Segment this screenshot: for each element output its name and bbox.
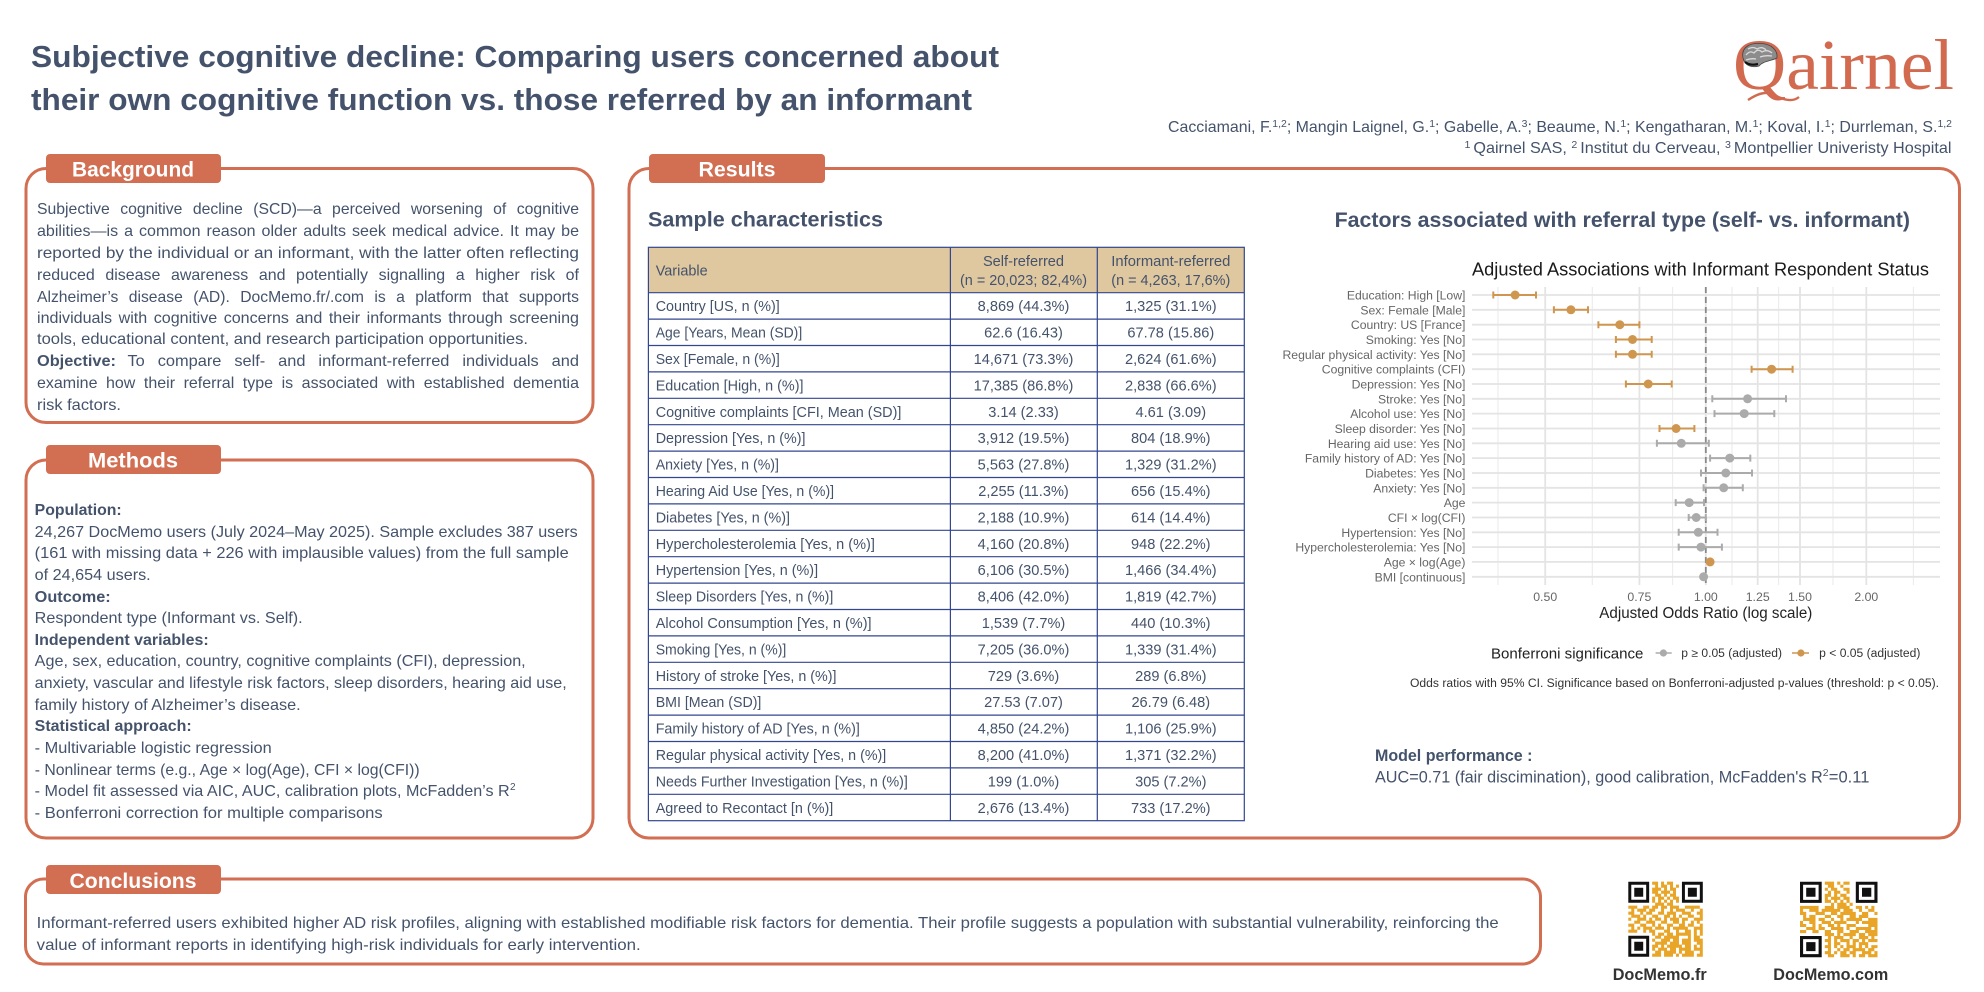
table: sample characteristics: Smoking [Yes, n (%)]: [656, 642, 786, 658]
table: sample characteristics: Cognitive complaints [CFI, Mean (SD)]: [656, 405, 901, 421]
heading: results: [649, 154, 825, 183]
table: sample characteristics: 440 (10.3%): [1131, 616, 1211, 632]
text: model performance: 2: [1823, 767, 1829, 779]
table: sample characteristics: Self-referred: [983, 254, 1064, 270]
text: conclusions: value of informant reports in identifying high-risk individuals for early intervention.: [37, 937, 641, 954]
y axis labels: Stroke: Yes [No]: [1378, 392, 1465, 406]
table: sample characteristics: History of stroke [Yes, n (%)]: [656, 669, 836, 685]
text: methods: - Multivariable logistic regression: [35, 740, 272, 757]
y axis labels: Sleep disorder: Yes [No]: [1335, 422, 1465, 436]
authors: 1,2: [1272, 118, 1287, 130]
text: background paragraph: risk factors.: [37, 397, 121, 414]
table: sample characteristics: 26.79 (6.48): [1131, 695, 1210, 711]
QR code: DocMemo.fr: [1613, 883, 1707, 984]
y axis labels: [1282, 288, 1466, 584]
table: sample characteristics: 2,838 (66.6%): [1125, 378, 1217, 394]
y axis labels: Regular physical activity: Yes [No]: [1282, 348, 1465, 362]
table: sample characteristics: Depression [Yes, n (%)]: [656, 431, 806, 447]
authors: 3: [1522, 118, 1528, 130]
table: sample characteristics: 4,850 (24.2%): [978, 722, 1069, 738]
authors: ; Kengatharan, M.: [1626, 119, 1753, 136]
table: sample characteristics: 804 (18.9%): [1131, 431, 1211, 447]
authors: [1168, 118, 1952, 157]
text: methods: Statistical approach:: [35, 718, 192, 735]
logo: Qairnel: Qairnel: [1733, 25, 1954, 105]
table: sample characteristics: Variable: [656, 264, 708, 280]
text: background paragraph: abilities—is a common reason older adults seek medical advice. It may be: [37, 223, 579, 240]
QR code: DocMemo.com: [1773, 883, 1888, 984]
y axis labels: Diabetes: Yes [No]: [1365, 466, 1465, 480]
text: methods: [35, 502, 578, 822]
table: sample characteristics: Alcohol Consumption [Yes, n (%)]: [656, 616, 872, 632]
table: sample characteristics: Sex [Female, n (%)]: [656, 352, 780, 368]
text: model performance: [1375, 747, 1869, 786]
title: Subjective cognitive decline: Comparing users concerned about: [31, 39, 999, 74]
y axis labels: Sex: Female [Male]: [1360, 303, 1465, 317]
text: methods: 2: [510, 782, 516, 793]
text: model performance: =0.11: [1829, 768, 1869, 786]
heading: sample characteristics: Sample characteristics: [648, 208, 883, 232]
table: sample characteristics: Needs Further Investigation [Yes, n (%)]: [656, 774, 908, 790]
authors: 1,2: [1937, 118, 1952, 130]
authors: ; Beaume, N.: [1527, 119, 1620, 136]
table: sample characteristics: Country [US, n (%)]: [656, 299, 780, 315]
text: conclusions: Informant-referred users exhibited higher AD risk profiles, aligning with established modifiable risk factors for dementia. Their profile suggests a population with substantial vulnerability, reinforcing the: [37, 915, 1499, 932]
table: sample characteristics: 8,406 (42.0%): [978, 590, 1069, 606]
text: methods: - Model fit assessed via AIC, AUC, calibration plots, McFadden’s R: [35, 783, 510, 800]
y axis labels: Alcohol use: Yes [No]: [1350, 407, 1465, 421]
heading: methods: Methods: [88, 450, 178, 472]
y axis labels: Family history of AD: Yes [No]: [1305, 452, 1465, 466]
authors: 1: [1825, 118, 1831, 130]
text: background paragraph: [37, 201, 580, 414]
text: methods: Age, sex, education, country, cognitive complaints (CFI), depression,: [35, 653, 526, 670]
legend: Bonferroni significance: p ≥ 0.05 (adjusted): [1681, 648, 1782, 660]
y axis labels: Education: High [Low]: [1347, 288, 1465, 302]
table: sample characteristics: Sleep Disorders [Yes, n (%)]: [656, 590, 833, 606]
y axis labels: Depression: Yes [No]: [1352, 378, 1465, 392]
text: background paragraph: To compare self- and informant-referred individuals and: [128, 353, 579, 370]
x axis tick labels: 1.25: [1746, 590, 1770, 604]
table: sample characteristics: 1,325 (31.1%): [1125, 299, 1217, 315]
authors: 1: [1753, 118, 1759, 130]
y axis labels: Age: [1444, 496, 1466, 510]
title: [31, 39, 999, 117]
text: methods: Respondent type (Informant vs. Self).: [35, 610, 303, 627]
table: sample characteristics: 948 (22.2%): [1131, 537, 1211, 553]
table: sample characteristics: 14,671 (73.3%): [974, 352, 1073, 368]
table: sample characteristics: Hearing Aid Use [Yes, n (%)]: [656, 484, 834, 500]
text: methods: of 24,654 users.: [35, 567, 151, 584]
points and confidence intervals: [1493, 290, 1793, 581]
y axis labels: Hypertension: Yes [No]: [1341, 526, 1465, 540]
y axis labels: Smoking: Yes [No]: [1366, 333, 1465, 347]
panel: conclusions: [26, 865, 1540, 964]
y axis labels: Hypercholesterolemia: Yes [No]: [1295, 541, 1465, 555]
table: sample characteristics: 67.78 (15.86): [1127, 326, 1214, 342]
table: sample characteristics: Hypertension [Yes, n (%)]: [656, 563, 818, 579]
table: sample characteristics: Family history of AD [Yes, n (%)]: [656, 722, 860, 738]
table: sample characteristics: (n = 4,263, 17,6%): [1111, 273, 1230, 289]
text: model performance: Model performance :: [1375, 747, 1532, 765]
panel: results: [629, 154, 1960, 838]
authors: Cacciamani, F.: [1168, 119, 1273, 136]
table: sample characteristics: Hypercholesterolemia [Yes, n (%)]: [656, 537, 875, 553]
text: conclusions: [37, 915, 1499, 954]
text: background paragraph: Objective:: [37, 353, 116, 370]
table: sample characteristics: 4,160 (20.8%): [978, 537, 1069, 553]
x axis title: Adjusted Odds Ratio (log scale): [1599, 605, 1812, 622]
table: sample characteristics: 2,676 (13.4%): [978, 801, 1069, 817]
text: methods: anxiety, vascular and lifestyle risk factors, sleep disorders, hearing aid use,: [35, 675, 567, 692]
authors: ; Koval, I.: [1758, 119, 1825, 136]
panel: background: [26, 154, 593, 422]
table: sample characteristics: 8,200 (41.0%): [978, 748, 1069, 764]
text: methods: - Bonferroni correction for multiple comparisons: [35, 805, 383, 822]
heading: methods: [46, 445, 221, 474]
table: sample characteristics: Education [High, n (%)]: [656, 378, 804, 394]
y axis labels: Age × log(Age): [1384, 555, 1465, 569]
table: sample characteristics: 7,205 (36.0%): [978, 642, 1069, 658]
table: sample characteristics: Age [Years, Mean (SD)]: [656, 326, 802, 342]
label: DocMemo.fr: DocMemo.fr: [1613, 966, 1707, 984]
y axis labels: BMI [continuous]: [1375, 570, 1465, 584]
panel: methods: [26, 445, 593, 838]
chart title: Adjusted Associations with Informant Respondent Status: [1472, 258, 1929, 280]
x axis tick labels: [1533, 590, 1878, 604]
y axis labels: CFI × log(CFI): [1388, 511, 1465, 525]
heading: background: Background: [72, 158, 194, 182]
x axis tick labels: 1.00: [1694, 590, 1718, 604]
table: sample characteristics: Diabetes [Yes, n (%)]: [656, 510, 790, 526]
authors: Institut du Cerveau,: [1580, 140, 1725, 157]
heading: factors associated: Factors associated with referral type (self- vs. informant): [1335, 209, 1910, 232]
x axis tick labels: 0.75: [1627, 590, 1652, 604]
text: background paragraph: examine how their referral type is associated with established dementia: [37, 375, 579, 392]
text: methods: Independent variables:: [35, 632, 209, 649]
heading: conclusions: Conclusions: [70, 870, 196, 893]
authors: Montpellier Univeristy Hospital: [1734, 140, 1952, 157]
table: sample characteristics: 3.14 (2.33): [988, 405, 1059, 421]
x axis tick labels: 0.50: [1533, 590, 1557, 604]
table: sample characteristics: 27.53 (7.07): [984, 695, 1063, 711]
legend: Bonferroni significance: p < 0.05 (adjusted): [1819, 648, 1921, 660]
table: sample characteristics: BMI [Mean (SD)]: [656, 695, 761, 711]
chart: forest plot of adjusted odds ratios: [1282, 258, 1940, 690]
label: DocMemo.com: DocMemo.com: [1773, 966, 1888, 984]
authors: Qairnel SAS,: [1473, 140, 1571, 157]
heading: background: [46, 154, 221, 183]
text: background paragraph: individuals with cognitive concerns and their informants through screening: [37, 310, 579, 327]
authors: 3: [1725, 139, 1734, 151]
text: background paragraph: Alzheimer’s disease (AD). DocMemo.fr/.com is a platform that supports: [37, 289, 579, 306]
y axis labels: Anxiety: Yes [No]: [1373, 481, 1465, 495]
chart footnote: Odds ratios with 95% CI. Significance based on Bonferroni-adjusted p-values (threshold: p < 0.05).: [1410, 678, 1939, 690]
heading: conclusions: [46, 865, 221, 894]
table: sample characteristics: 289 (6.8%): [1135, 669, 1206, 685]
y axis labels: Hearing aid use: Yes [No]: [1328, 437, 1465, 451]
authors: ; Durrleman, S.: [1831, 119, 1937, 136]
table: sample characteristics: 199 (1.0%): [988, 774, 1059, 790]
text: methods: Outcome:: [35, 589, 111, 606]
table: sample characteristics: Informant-referred: [1111, 254, 1230, 270]
y axis labels: Country: US [France]: [1351, 318, 1465, 332]
heading: results: Results: [698, 158, 776, 182]
table: sample characteristics: 3,912 (19.5%): [978, 431, 1069, 447]
table: sample characteristics: 2,188 (10.9%): [978, 510, 1069, 526]
text: background paragraph: reported by the individual or an informant, with the latter often reflecting: [37, 245, 579, 262]
authors: 2: [1571, 139, 1580, 151]
table: sample characteristics: 2,255 (11.3%): [978, 484, 1069, 500]
table: sample characteristics: 305 (7.2%): [1135, 774, 1206, 790]
table: sample characteristics: 1,466 (34.4%): [1125, 563, 1217, 579]
table: sample characteristics: 614 (14.4%): [1131, 510, 1211, 526]
text: methods: family history of Alzheimer’s disease.: [35, 697, 301, 714]
text: background paragraph: reduced disease awareness and potentially signalling a higher risk of: [37, 267, 580, 284]
table: sample characteristics: (n = 20,023; 82,4%): [960, 273, 1087, 289]
table: sample characteristics: 8,869 (44.3%): [978, 299, 1069, 315]
y axis labels: Cognitive complaints (CFI): [1322, 363, 1465, 377]
table: sample characteristics: 62.6 (16.43): [984, 326, 1063, 342]
authors: 1: [1620, 118, 1626, 130]
legend: Bonferroni significance: [1491, 646, 1921, 662]
table: sample characteristics: 1,819 (42.7%): [1125, 590, 1217, 606]
table: sample characteristics: 17,385 (86.8%): [974, 378, 1073, 394]
table: sample characteristics: 729 (3.6%): [988, 669, 1059, 685]
table: sample characteristics: Regular physical activity [Yes, n (%)]: [656, 748, 886, 764]
x axis tick labels: 2.00: [1854, 590, 1878, 604]
text: methods: - Nonlinear terms (e.g., Age × log(Age), CFI × log(CFI)): [35, 762, 420, 779]
authors: 1: [1429, 118, 1435, 130]
table: sample characteristics: 2,624 (61.6%): [1125, 352, 1217, 368]
table: sample characteristics: [648, 247, 1244, 821]
text: methods: 24,267 DocMemo users (July 2024–May 2025). Sample excludes 387 users: [35, 524, 578, 541]
table: sample characteristics: 1,339 (31.4%): [1125, 642, 1217, 658]
text: background paragraph: tools, educational content, and research participation opportunities.: [37, 331, 528, 348]
text: methods: Population:: [35, 502, 122, 519]
authors: ; Mangin Laignel, G.: [1287, 119, 1429, 136]
text: model performance: AUC=0.71 (fair discimination), good calibration, McFadden's R: [1375, 768, 1823, 786]
table: sample characteristics: 733 (17.2%): [1131, 801, 1211, 817]
table: sample characteristics: 1,371 (32.2%): [1125, 748, 1217, 764]
legend: Bonferroni significance: Bonferroni significance: [1491, 646, 1643, 662]
authors: 1: [1464, 139, 1473, 151]
table: sample characteristics: 656 (15.4%): [1131, 484, 1211, 500]
title: their own cognitive function vs. those referred by an informant: [31, 82, 972, 117]
table: sample characteristics: 6,106 (30.5%): [978, 563, 1069, 579]
table: sample characteristics: Agreed to Recontact [n (%)]: [656, 801, 833, 817]
table: sample characteristics: 4.61 (3.09): [1136, 405, 1206, 421]
authors: ; Gabelle, A.: [1435, 119, 1522, 136]
table: sample characteristics: 1,539 (7.7%): [982, 616, 1065, 632]
table: sample characteristics: Anxiety [Yes, n (%)]: [656, 458, 779, 474]
table: sample characteristics: 1,106 (25.9%): [1125, 722, 1217, 738]
table: sample characteristics: 1,329 (31.2%): [1125, 458, 1217, 474]
text: methods: (161 with missing data + 226 with implausible values) from the full sample: [35, 545, 569, 562]
x axis tick labels: 1.50: [1788, 590, 1812, 604]
text: background paragraph: Subjective cognitive decline (SCD)—a perceived worsening of cognitive: [37, 201, 579, 218]
table: sample characteristics: 5,563 (27.8%): [978, 458, 1069, 474]
